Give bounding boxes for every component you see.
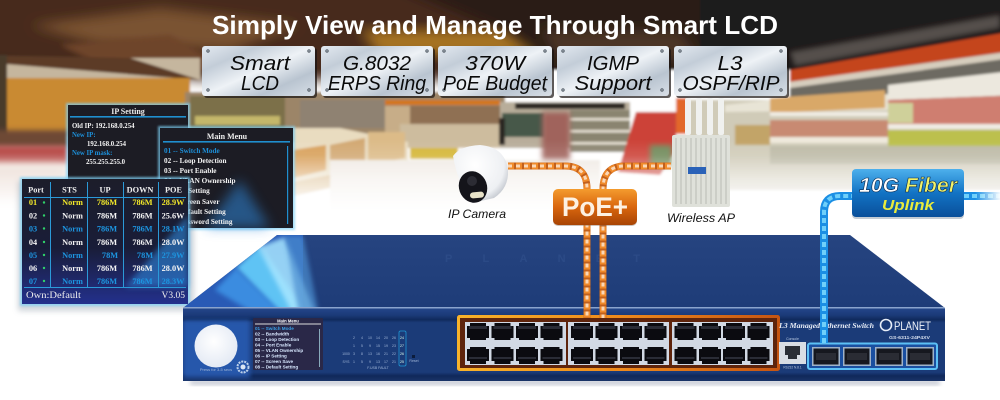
- panel: Main Menu LCD screen: 03 -- Port Enable: [164, 167, 217, 175]
- red sign: [618, 112, 676, 175]
- status LEDs: 25: [400, 360, 404, 364]
- deli glass cases: [293, 128, 408, 184]
- status LEDs: 24: [400, 336, 404, 340]
- status LEDs: 19: [384, 344, 388, 348]
- PLANET logo: PLANET: [894, 319, 932, 333]
- status LEDs: 22: [392, 352, 396, 356]
- panel: Main Menu LCD screen: 06 -- Screen Saver: [164, 198, 220, 206]
- panel: Main Menu LCD screen: 01 -- Switch Mode: [164, 147, 220, 155]
- switch mini LCD: 08 -- Default Setting: [255, 364, 298, 370]
- status LEDs: 26: [392, 336, 396, 340]
- badge: 370W PoE Budget: PoE Budget: [443, 73, 548, 95]
- panel: Main Menu LCD screen: 02 -- Loop Detection: [164, 157, 226, 165]
- 10G Fiber Uplink label: Uplink: [882, 197, 935, 214]
- badge: IGMP Support: Support: [574, 73, 653, 95]
- badge: L3 OSPF/RIP: [674, 46, 789, 98]
- panel: IP Setting LCD screen: [66, 103, 190, 181]
- table footer: [26, 290, 185, 301]
- badge: L3 OSPF/RIP: L3: [718, 53, 742, 75]
- switch mini LCD: [253, 318, 323, 370]
- PoE ports highlight box: [458, 316, 778, 370]
- panel: port status LCD table: [18, 177, 194, 311]
- table rows: 786M: [132, 238, 153, 247]
- shopping cart: [542, 112, 570, 160]
- table rows: 78M: [102, 251, 118, 260]
- status LEDs: 8: [361, 352, 363, 356]
- status LEDs: 5: [361, 344, 363, 348]
- table header: [28, 186, 182, 194]
- red beam: [790, 30, 1000, 82]
- status LEDs: 27: [400, 344, 404, 348]
- switch top surface: [183, 235, 945, 308]
- table rows: 78M: [137, 251, 153, 260]
- RJ45 lower row: [467, 347, 770, 364]
- badge: G.8032 ERPS Ring: G.8032: [343, 53, 411, 75]
- status LEDs: 21: [384, 352, 388, 356]
- status LEDs: 1: [353, 344, 355, 348]
- title: Simply View and Manage Through Smart LCD: [212, 10, 778, 40]
- panel: IP Setting LCD screen: 192.168.0.254: [87, 141, 127, 148]
- table rows: 02: [29, 212, 37, 220]
- badge: G.8032 ERPS Ring: [321, 46, 435, 98]
- table rows: 786M: [132, 264, 153, 273]
- switch top light rays: [184, 235, 320, 307]
- table rows: Norm: [62, 198, 83, 207]
- mid band behind badges: [185, 92, 505, 142]
- table rows: 786M: [97, 277, 117, 286]
- table header: Port: [28, 186, 44, 194]
- white fade into page: [0, 140, 1000, 218]
- status LEDs: 9: [369, 360, 371, 364]
- PoE+ label: [553, 189, 637, 226]
- switch shadow: [190, 380, 940, 385]
- SFP ports highlight box: [808, 344, 937, 369]
- table rows: 07: [29, 277, 37, 286]
- status LEDs: 5: [361, 360, 363, 364]
- table footer: V3.05: [162, 291, 185, 301]
- table rows: 786M: [97, 212, 117, 220]
- status LEDs: 20: [384, 336, 388, 340]
- status LEDs: 4: [361, 336, 363, 340]
- antennas: [685, 98, 724, 135]
- PoE+ label: PoE+: [562, 192, 628, 222]
- status LEDs: 2: [353, 336, 355, 340]
- status LEDs: 15: [376, 344, 380, 348]
- table rows: 28.9W: [162, 198, 185, 207]
- table header: POE: [165, 186, 182, 194]
- badge: Smart LCD: [202, 46, 317, 98]
- right shelves: [688, 100, 1000, 190]
- table rows: 786M: [132, 212, 153, 220]
- fiber uplink cable: [824, 190, 1000, 343]
- status dots: [43, 201, 45, 282]
- panel: Main Menu LCD screen: [158, 126, 295, 230]
- network switch: [183, 235, 945, 385]
- table rows: 786M: [97, 238, 117, 247]
- status LEDs: 13: [376, 360, 380, 364]
- switch mini LCD: 01 -- Switch Mode: [255, 326, 294, 331]
- 10G Fiber Uplink label: [852, 169, 964, 219]
- table header: UP: [99, 186, 111, 194]
- table rows: 01: [29, 198, 37, 207]
- status LEDs: SYS: [342, 360, 350, 364]
- LED highlight box: [399, 331, 406, 366]
- badge: Smart LCD: LCD: [241, 73, 279, 95]
- table rows: 786M: [132, 198, 153, 207]
- table rows: Norm: [62, 264, 83, 273]
- switch label: L3 Managed Ethernet Switch: [778, 321, 874, 330]
- red seating: [0, 146, 68, 164]
- RJ45 upper row: [467, 323, 770, 340]
- PoE+ cables: [508, 166, 671, 318]
- status LEDs: F.USB FAULT: [367, 366, 390, 370]
- console port: [779, 337, 806, 370]
- table rows: 04: [29, 238, 37, 247]
- table rows: Norm: [62, 212, 83, 220]
- panel: IP Setting LCD screen: IP Setting: [111, 107, 145, 116]
- status LEDs: 14: [376, 336, 380, 340]
- table rows: 05: [29, 251, 37, 260]
- panel: IP Setting LCD screen: 255.255.255.0: [86, 159, 126, 166]
- console port: RS232 N.8.1: [783, 366, 802, 370]
- status LEDs: 21: [392, 360, 396, 364]
- switch mini LCD: 03 -- Loop Detection: [255, 337, 299, 342]
- label: Wireless AP: Wireless AP: [667, 211, 735, 225]
- badge: IGMP Support: [557, 46, 671, 98]
- table footer: Own:Default: [26, 290, 81, 301]
- table rows: 786M: [132, 224, 153, 234]
- switch mini LCD: Main Menu: [277, 318, 299, 324]
- table rows: Norm: [62, 238, 83, 247]
- status LEDs: 26: [400, 352, 404, 356]
- right ceiling: [700, 0, 1000, 70]
- switch front panel: [183, 308, 945, 381]
- panel: IP Setting LCD screen: New IP mask:: [72, 150, 112, 157]
- table rows: 786M: [97, 264, 117, 273]
- table rows: Norm: [62, 277, 83, 286]
- badge: 370W PoE Budget: 370W: [465, 53, 527, 75]
- table rows: 03: [29, 224, 37, 234]
- status LEDs: 10: [368, 336, 372, 340]
- switch mini LCD: 07 -- Screen Save: [255, 359, 293, 364]
- feature badges: [202, 46, 789, 98]
- switch mini LCD: 04 -- Port Enable: [255, 342, 292, 348]
- panel: Main Menu LCD screen: 04 -- VLAN Ownership: [164, 177, 236, 185]
- table header: STS: [62, 186, 77, 194]
- status LEDs: [342, 336, 419, 370]
- badge: Smart LCD: Smart: [230, 53, 292, 75]
- PLANET logo: [880, 319, 932, 333]
- panel: Main Menu LCD screen: Main Menu: [207, 132, 248, 141]
- icon: wireless AP: [672, 98, 730, 207]
- status LEDs: 17: [384, 360, 388, 364]
- icon: gear: [238, 362, 248, 372]
- table rows: 27.9W: [162, 251, 185, 260]
- switch mini LCD: 05 -- VLAN Ownership: [255, 348, 303, 353]
- status LEDs: 13: [368, 352, 372, 356]
- deli goods shelves: [190, 96, 285, 130]
- badge: IGMP Support: IGMP: [587, 53, 640, 75]
- icon: IP camera: [453, 145, 508, 207]
- table rows: 786M: [97, 224, 117, 234]
- table rows: 28.3W: [162, 277, 185, 286]
- label: IP Camera: IP Camera: [448, 207, 506, 221]
- status LEDs: 3: [353, 352, 355, 356]
- table rows: Norm: [62, 251, 83, 260]
- table rows: 06: [29, 264, 37, 273]
- table rows: 786M: [132, 277, 153, 286]
- table rows: 786M: [97, 198, 117, 207]
- panel: Main Menu LCD screen: 05 -- IP Setting: [164, 187, 210, 195]
- store floor: [330, 160, 600, 210]
- watermark logo on top: PLANET: [445, 253, 640, 265]
- panel: IP Setting LCD screen: New IP:: [72, 132, 96, 139]
- model number: GS-6311-24P4XV: [889, 335, 931, 341]
- switch mini LCD: 02 -- Bandwidth: [255, 332, 289, 336]
- status LEDs: 23: [392, 344, 396, 348]
- table rows: 28.0W: [162, 238, 185, 247]
- centre back: [500, 102, 630, 148]
- switch mini LCD: 06 -- IP Setting: [255, 354, 287, 358]
- table rows: Norm: [62, 224, 83, 234]
- table rows: 25.6W: [162, 212, 185, 220]
- badge: 370W PoE Budget: [438, 46, 554, 98]
- panel: IP Setting LCD screen: Old IP: 192.168.0.254: [72, 123, 135, 130]
- table header: DOWN: [127, 186, 153, 194]
- deli food counter: [400, 124, 500, 148]
- status LEDs: Reset: [409, 359, 419, 363]
- network switch: Press for 3-5 secs: [200, 367, 232, 372]
- 10G Fiber Uplink label: 10G Fiber: [859, 175, 958, 197]
- ceiling left wood: [0, 0, 520, 80]
- status LEDs: 1: [353, 360, 355, 364]
- table rows: 28.0W: [162, 264, 185, 273]
- centre shelves: [570, 110, 630, 152]
- status LEDs: 1000: [342, 352, 350, 356]
- panel: Main Menu LCD screen: 08 -- Password Setting: [164, 218, 233, 226]
- panel: Main Menu LCD screen: 07 -- Default Setting: [164, 208, 226, 216]
- status LEDs: 16: [376, 352, 380, 356]
- table rows: 28.1W: [162, 224, 185, 234]
- table rows: [29, 198, 185, 286]
- badge: G.8032 ERPS Ring: ERPS Ring: [328, 73, 426, 95]
- white mode button: [194, 324, 238, 368]
- back wall left: [0, 58, 200, 80]
- status LEDs: 9: [369, 344, 371, 348]
- console port: Console: [786, 337, 799, 341]
- badge: L3 OSPF/RIP: OSPF/RIP: [682, 73, 780, 95]
